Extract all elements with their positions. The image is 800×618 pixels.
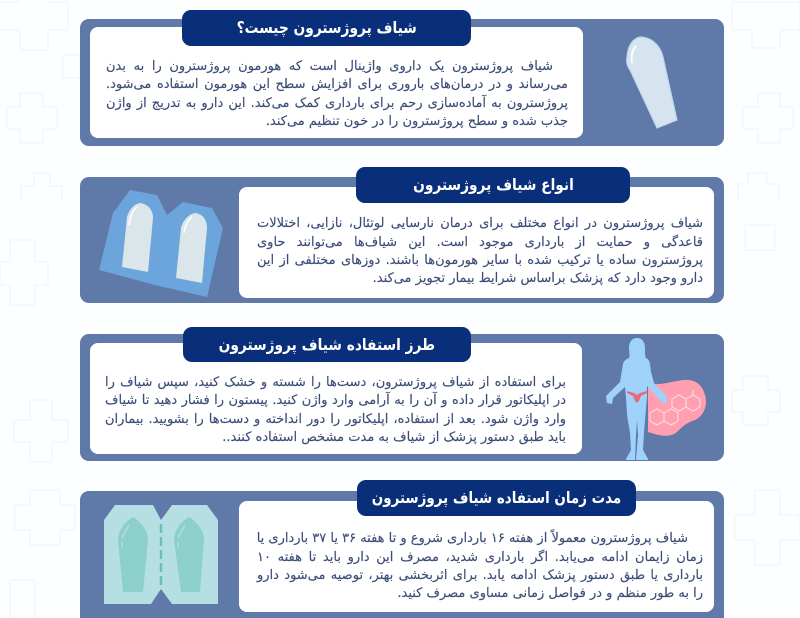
text block: types: قاعدگی و حمایت از بارداری موجود است. این شیاف‌ها می‌توانند حاوی — [257, 235, 703, 250]
text card: what is — [90, 27, 583, 138]
icon: suppository blister pack — [99, 190, 223, 297]
text block: what is: شیاف پروژسترون یک داروی واژینال است که هورمون پروژسترون را به بدن — [106, 59, 553, 74]
heading: how to use — [183, 327, 471, 362]
panel: types — [80, 177, 724, 303]
panel: duration — [80, 491, 724, 618]
text block: how to use — [105, 375, 566, 445]
text block: what is: جذب شده و سطح پروژسترون را در خون تنظیم می‌کند. — [266, 114, 568, 129]
icon: suppository — [626, 36, 678, 129]
heading: how to use: طرز استفاده شیاف پروژسترون — [219, 335, 435, 354]
body — [606, 338, 667, 460]
text block: how to use: برای استفاده از شیاف پروژسترون، دست‌ها را شسته و خشک کنید، سپس شیاف را — [105, 375, 566, 390]
text block: duration: را به طور منظم و در فواصل زمانی مساوی مصرف کنید. — [397, 586, 703, 601]
molecule — [650, 390, 700, 425]
text block: how to use: در اپلیکاتور قرار داده و آن را به آرامی وارد واژن کنید. پیستون را فشار دهید تا شیاف — [105, 393, 566, 408]
heading: duration — [357, 480, 636, 516]
pelvic mark — [627, 391, 647, 403]
text block: duration: شیاف پروژسترون معمولاً از هفته ۱۶ بارداری شروع و تا هفته ۳۶ یا ۳۷ بارداری یا — [257, 531, 688, 546]
text block: types: دارو وجود دارد که پزشک براساس شرایط بیمار تجویز می‌کند. — [373, 271, 703, 286]
text block: duration: زمان زایمان ادامه می‌یابد. اگر بارداری شدید، مصرف این دارو باید تا هفته ۱۰ — [257, 550, 703, 565]
text block: types — [257, 216, 703, 286]
text card: how to use — [90, 343, 582, 454]
text block: duration: بارداری یا طبق دستور پزشک ادامه یابد. برای اثربخشی بهتر، توصیه می‌شود دارو — [257, 568, 703, 583]
text block: how to use: باید طبق دستور پزشک از شیاف به مدت مشخص استفاده کنند.. — [222, 430, 566, 445]
icon: two suppositories in blister — [104, 505, 218, 604]
text card: duration — [239, 501, 714, 612]
text block: types: شیاف پروژسترون در انواع مختلف برای درمان نارسایی لوتئال، نازایی، اختلالات — [257, 216, 703, 231]
text block: how to use: وارد واژن شود. بعد از استفاده، اپلیکاتور را دور انداخته و دست‌ها را بشویید. بیماران — [105, 412, 566, 427]
panel: how to use — [80, 334, 724, 461]
text block: duration — [256, 529, 703, 601]
heading: types: انواع شیاف پروژسترون — [413, 175, 573, 194]
text block: what is: می‌رساند و در درمان‌های باروری برای افزایش سطح این هورمون استفاده می‌شود. — [106, 77, 568, 92]
text block: what is: پروژسترون به آماده‌سازی رحم برای بارداری کمک می‌کند. این دارو به تدریج از واژن — [106, 96, 568, 111]
text block: what is — [106, 59, 568, 129]
text block: types: پروژسترون ساده یا ترکیب شده با سایر هورمون‌ها باشند. دوزهای مختلفی از این — [257, 253, 703, 268]
hormone blob — [648, 380, 706, 436]
text card: types — [239, 187, 714, 298]
heading: duration: مدت زمان استفاده شیاف پروژسترون — [372, 488, 621, 507]
heading: what is — [182, 10, 471, 46]
icon: female body and hormone molecule — [606, 338, 706, 460]
panel: what is progesterone suppository — [80, 19, 724, 146]
heading: types — [356, 167, 630, 203]
heading: what is: شیاف پروژسترون چیست؟ — [236, 18, 417, 37]
